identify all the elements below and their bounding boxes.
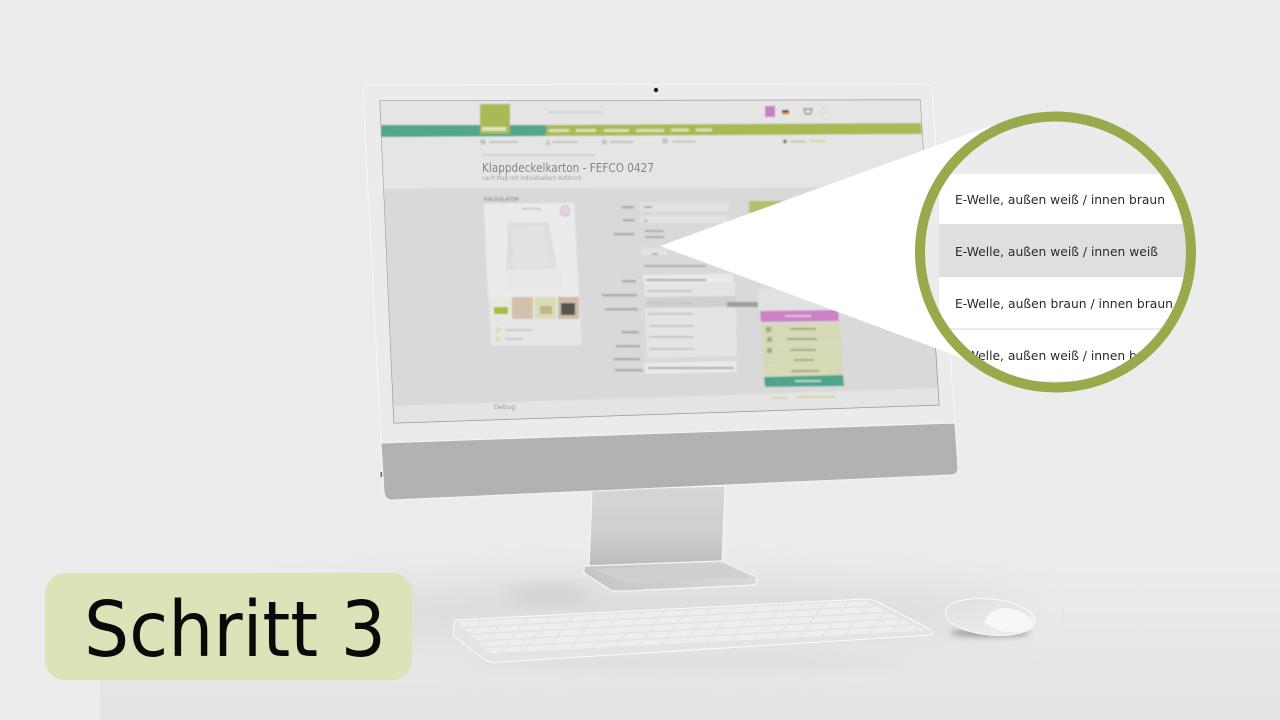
service row — [480, 138, 826, 145]
basket button — [760, 310, 839, 322]
step label: Schritt 3 — [84, 586, 386, 675]
action buttons — [761, 323, 840, 334]
row 4 — [951, 330, 1160, 381]
form labels — [602, 206, 643, 372]
logo — [480, 104, 510, 134]
page title: Klappdeckelkarton - FEFCO 0427 — [482, 160, 654, 175]
box illustration — [506, 222, 556, 270]
debug text: Debug — [494, 403, 515, 411]
product card — [484, 203, 582, 346]
page footer area — [393, 388, 939, 423]
screen: web page — [380, 100, 940, 423]
floor shadows — [260, 584, 1030, 666]
product image — [484, 203, 578, 297]
card links — [495, 327, 533, 342]
product card: MATERIAL — [522, 206, 542, 211]
row 2 highlighted: E-Welle, außen weiß / innen weiß — [955, 244, 1158, 259]
stand neck — [589, 486, 725, 569]
screen frame — [380, 100, 939, 423]
floor backdrop — [100, 560, 1280, 720]
calculator heading: KALKULATOR — [484, 197, 519, 203]
header icons — [765, 106, 826, 117]
side button — [380, 472, 382, 477]
keys — [458, 601, 926, 655]
monitor stand — [584, 486, 757, 591]
magnifier — [920, 116, 1199, 388]
monitor — [363, 84, 958, 500]
page content area — [381, 187, 938, 406]
page headings — [482, 160, 654, 411]
row 1 — [939, 174, 1199, 224]
footer links — [773, 396, 835, 399]
zoom callout wedge — [660, 126, 1000, 372]
row 3 — [939, 277, 1199, 328]
teal navigation bar — [381, 125, 546, 137]
navigation labels — [549, 128, 712, 132]
search placeholder — [548, 111, 603, 114]
material dropdown — [644, 283, 737, 358]
thumbnails — [490, 297, 579, 319]
row 2 highlighted — [939, 224, 1199, 277]
price panel — [749, 201, 844, 387]
monitor chin — [381, 423, 958, 500]
mouse — [943, 594, 1037, 640]
dropdown rows — [939, 174, 1199, 381]
stand foot — [584, 561, 757, 591]
row 4: E-Welle, außen weiß / innen braun — [955, 348, 1165, 363]
lens ring — [920, 116, 1191, 388]
tooltip — [727, 302, 769, 307]
monitor body — [363, 84, 955, 443]
keyboard body — [453, 599, 932, 662]
webcam — [654, 88, 658, 92]
form values — [644, 206, 734, 369]
page upper area — [380, 100, 940, 190]
lens interior — [920, 116, 1191, 388]
step badge — [45, 573, 412, 680]
green navigation bar — [546, 123, 922, 136]
keyboard — [453, 599, 932, 662]
row 1: E-Welle, außen weiß / innen braun — [955, 192, 1165, 207]
teal button — [764, 375, 844, 387]
mouse highlight — [984, 608, 1034, 632]
row 3: E-Welle, außen braun / innen braun — [955, 296, 1173, 311]
form inputs — [640, 203, 737, 374]
breadcrumb — [482, 154, 595, 156]
page subtitle: nach Maß mit individuellem Aufdruck — [482, 175, 582, 182]
